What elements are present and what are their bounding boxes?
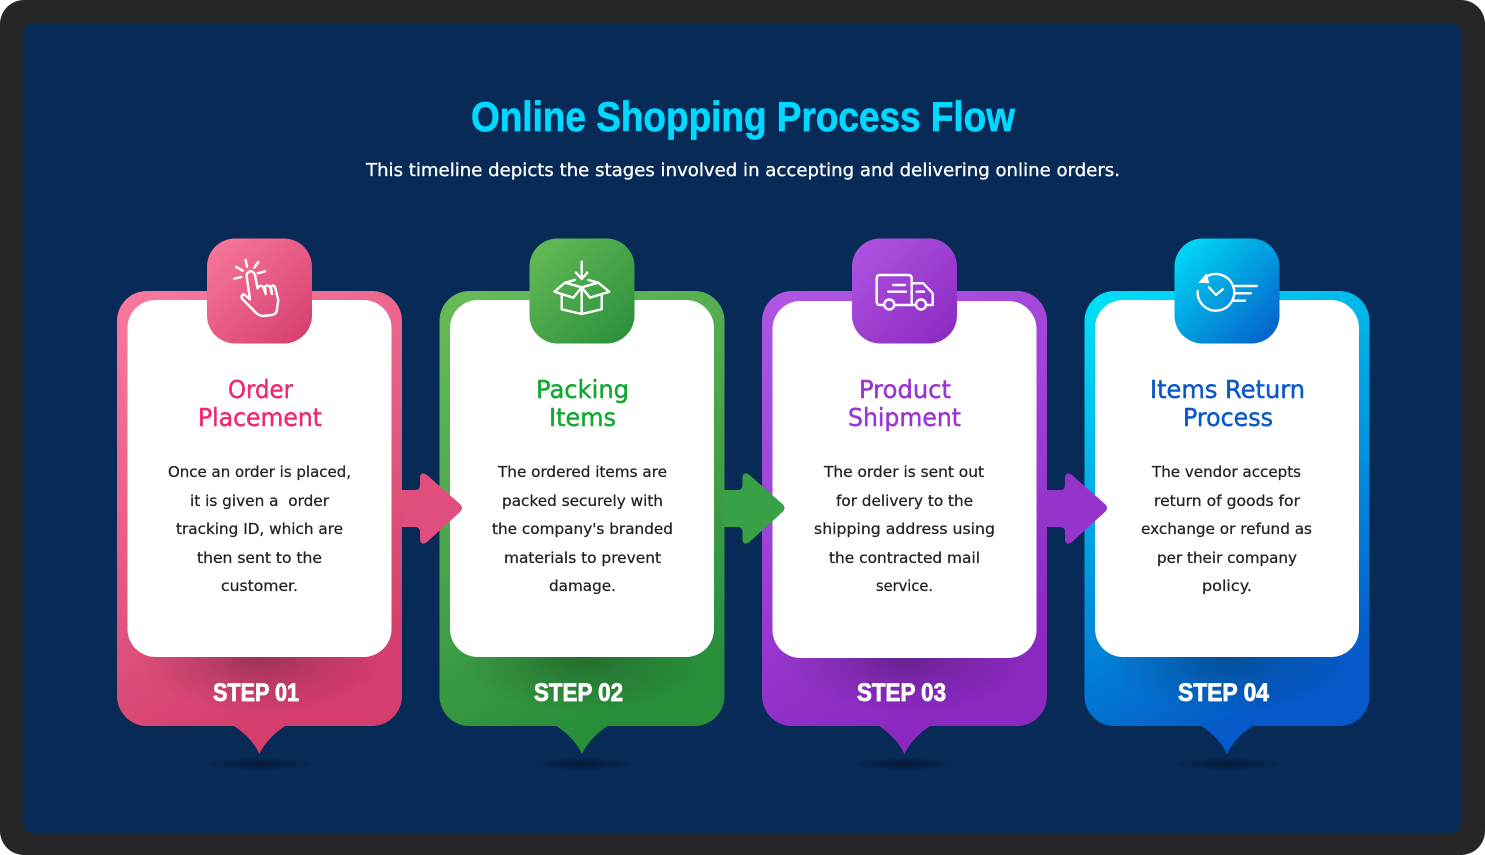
inner shadow: [138, 601, 382, 713]
step label: STEP 02: [534, 679, 623, 707]
step label: STEP 04: [1178, 679, 1269, 707]
description: The ordered items are: [497, 463, 667, 481]
description: exchange or refund as: [1141, 520, 1312, 538]
panel: step 03 product shipment: [762, 238, 1047, 770]
icon: box: [530, 238, 634, 344]
panel: step 02 packing items: [440, 238, 724, 770]
card body: [117, 291, 402, 754]
heading: Process: [1183, 403, 1273, 432]
description: damage.: [549, 577, 616, 595]
white content area: [128, 300, 392, 657]
description: [492, 463, 673, 595]
description: [168, 463, 351, 595]
icon: return clock: [1174, 238, 1280, 344]
description: Once an order is placed,: [168, 463, 351, 481]
ground shadow: [206, 758, 314, 770]
panel: step 01 order placement: [117, 238, 402, 770]
arrow: step 01 to step 02: [402, 473, 462, 544]
card body: [1084, 291, 1370, 754]
heading: [536, 375, 629, 432]
heading: [848, 375, 961, 432]
heading: Packing: [536, 375, 629, 404]
description: per their company: [1157, 549, 1297, 567]
white content area: [450, 300, 714, 657]
description: [1141, 463, 1312, 595]
description: tracking ID, which are: [176, 520, 343, 538]
heading: Order: [228, 375, 294, 404]
description: return of goods for: [1154, 492, 1301, 510]
heading: Placement: [198, 403, 322, 432]
inner shadow: [782, 602, 1026, 714]
description: The order is sent out: [823, 463, 984, 481]
card body: [762, 291, 1047, 754]
ground shadow: [528, 758, 636, 770]
ground shadow: [1173, 758, 1281, 770]
description: packed securely with: [502, 492, 663, 510]
step label: STEP 03: [857, 679, 946, 707]
description: The vendor accepts: [1151, 463, 1301, 481]
description: then sent to the: [197, 549, 322, 567]
title: Online Shopping Process Flow: [471, 93, 1015, 140]
card body: [440, 291, 724, 754]
description: materials to prevent: [504, 549, 661, 567]
heading: [1150, 375, 1305, 432]
description: service.: [876, 577, 933, 595]
step label: STEP 01: [213, 679, 299, 707]
heading: Items: [549, 403, 616, 432]
panel: step 04 items return process: [1084, 238, 1370, 770]
description: [814, 463, 995, 595]
icon: tapping hand: [207, 238, 312, 344]
description: policy.: [1202, 577, 1252, 595]
white content area: [772, 301, 1036, 658]
description: shipping address using: [814, 520, 995, 538]
heading: [198, 375, 322, 432]
description: for delivery to the: [836, 492, 973, 510]
ground shadow: [850, 758, 958, 770]
inner shadow: [460, 601, 704, 713]
inner shadow: [1105, 601, 1349, 713]
heading: Shipment: [848, 403, 961, 432]
arrow: step 03 to step 04: [1047, 473, 1107, 544]
icon: delivery truck: [852, 238, 957, 344]
subtitle: This timeline depicts the stages involved in accepting and delivering online orders.: [365, 160, 1120, 181]
white content area: [1095, 300, 1359, 657]
heading: Product: [859, 375, 951, 404]
description: the contracted mail: [829, 549, 980, 567]
description: the company's branded: [492, 520, 673, 538]
description: it is given a order: [190, 492, 330, 510]
description: customer.: [221, 577, 298, 595]
heading: Items Return: [1150, 375, 1305, 404]
arrow: step 02 to step 03: [724, 473, 784, 544]
